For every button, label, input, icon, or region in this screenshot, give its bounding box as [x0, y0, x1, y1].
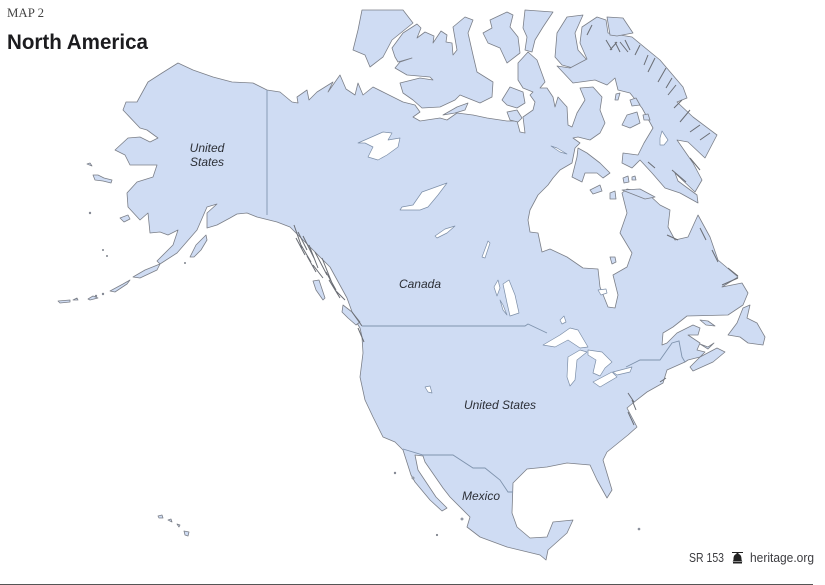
Alaskan islands — [58, 163, 207, 303]
label: United States: United States — [464, 398, 536, 412]
Baffin Island — [557, 17, 717, 203]
map number: MAP 2 — [7, 5, 44, 20]
Hawaiian Islands — [158, 515, 189, 536]
label: Alaska: United — [190, 141, 225, 155]
Belcher Islands — [610, 257, 616, 264]
Nova Scotia — [690, 348, 725, 371]
Prince Edward Island — [700, 343, 714, 349]
label: Mexico: Mexico — [462, 489, 500, 503]
Devon Island — [607, 17, 633, 36]
Nettilling Lake — [660, 131, 668, 145]
label: Canada: Canada — [399, 277, 441, 291]
website: heritage.org — [750, 550, 814, 565]
international borders — [267, 90, 685, 492]
report number: SR 153 — [689, 550, 724, 565]
Arctic islands — [353, 10, 717, 203]
icon: liberty bell — [732, 552, 743, 564]
Anticosti Island — [700, 320, 715, 326]
coastline fjord detail — [587, 25, 738, 425]
British Columbia coastal islands — [294, 225, 364, 342]
Southampton Island — [572, 148, 610, 182]
Newfoundland — [728, 305, 765, 345]
title: North America — [7, 31, 148, 54]
mainland — [115, 52, 748, 560]
small offshore islands — [394, 472, 640, 536]
lakes — [358, 131, 668, 393]
label: Alaska: States — [190, 155, 224, 169]
footer rule — [0, 584, 813, 585]
